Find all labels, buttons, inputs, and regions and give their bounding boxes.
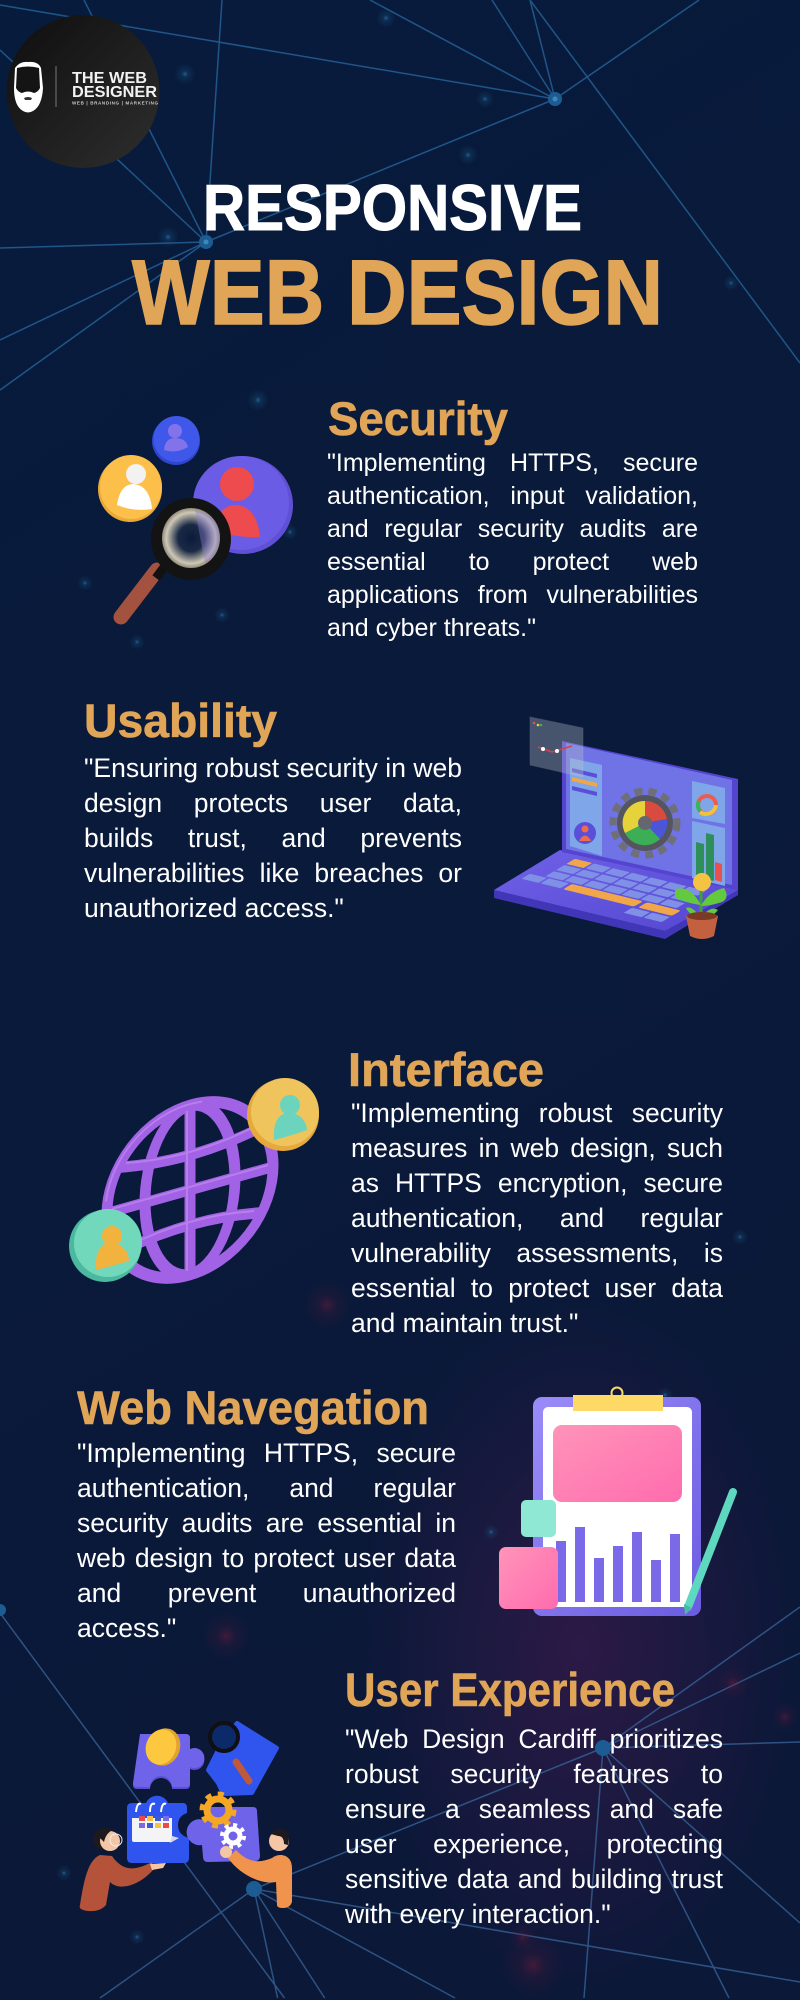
- panel: User Experience: [80, 1670, 723, 1929]
- panel: Usability: [84, 700, 738, 939]
- text block: "Ensuring robust security in web: [84, 753, 462, 783]
- text block: essential to protect web: [327, 548, 698, 576]
- text block: sensitive data and building trust: [345, 1864, 723, 1894]
- text block: and regular security audits are: [327, 515, 698, 543]
- panel: Security: [98, 400, 698, 642]
- text block: web design to protect user data: [77, 1543, 456, 1573]
- gears: [202, 1794, 244, 1847]
- icon: puzzle team illustration: [80, 1720, 292, 1912]
- text block: design protects user data,: [84, 788, 462, 818]
- text block: "Implementing HTTPS, secure: [327, 449, 698, 477]
- text block: access.": [77, 1613, 176, 1643]
- text block: essential to protect user data: [351, 1273, 723, 1303]
- text block: as HTTPS encryption, secure: [351, 1168, 723, 1198]
- text block: [327, 449, 698, 642]
- text block: and cyber threats.": [327, 614, 536, 642]
- text block: authentication, input validation,: [327, 482, 698, 510]
- logo: The Web Designer badge: DESIGNER: [72, 84, 157, 101]
- panel: Interface: [69, 1045, 723, 1338]
- text block: [77, 1438, 456, 1643]
- text block: vulnerabilities like breaches or: [84, 858, 462, 888]
- text block: authentication, and regular: [77, 1473, 456, 1503]
- text block: user experience, protecting: [345, 1829, 723, 1859]
- text block: and prevent unauthorized: [77, 1578, 456, 1608]
- text block: vulnerability assessments, is: [351, 1238, 723, 1268]
- text block: unauthorized access.": [84, 893, 344, 923]
- icon: globe with users: [69, 1078, 319, 1284]
- text block: "Web Design Cardiff prioritizes: [345, 1724, 723, 1754]
- text block: applications from vulnerabilities: [327, 581, 698, 609]
- text block: "Implementing HTTPS, secure: [77, 1438, 456, 1468]
- text block: [351, 1098, 723, 1338]
- icon: bearded face: [14, 62, 43, 112]
- icon: laptop dashboard: [494, 716, 738, 939]
- text block: security audits are essential in: [77, 1508, 456, 1538]
- logo: The Web Designer badge: THE WEB: [72, 70, 147, 87]
- man: [220, 1829, 292, 1908]
- text block: [84, 753, 462, 923]
- text block: ensure a seamless and safe: [345, 1794, 723, 1824]
- logo: The Web Designer badge: WEB | BRANDING | MARKETING: [72, 100, 158, 106]
- text block: [345, 1724, 723, 1929]
- text block: builds trust, and prevents: [84, 823, 462, 853]
- icon: green user coin: [69, 1209, 142, 1282]
- text block: and maintain trust.": [351, 1308, 578, 1338]
- woman: [80, 1828, 166, 1911]
- calendar: [132, 1804, 179, 1843]
- title: [131, 175, 663, 330]
- icon: yellow user coin: [247, 1078, 319, 1151]
- text block: authentication, and regular: [351, 1203, 723, 1233]
- text block: robust security features to: [345, 1759, 723, 1789]
- icon: users and magnifier: [98, 416, 293, 624]
- panel: Web Navegation: [77, 1385, 737, 1643]
- logo: The Web Designer badge: [6, 15, 160, 168]
- text block: "Implementing robust security: [351, 1098, 723, 1128]
- icon: clipboard chart with pen: [499, 1386, 737, 1616]
- text block: with every interaction.": [345, 1899, 611, 1929]
- text block: measures in web design, such: [351, 1133, 723, 1163]
